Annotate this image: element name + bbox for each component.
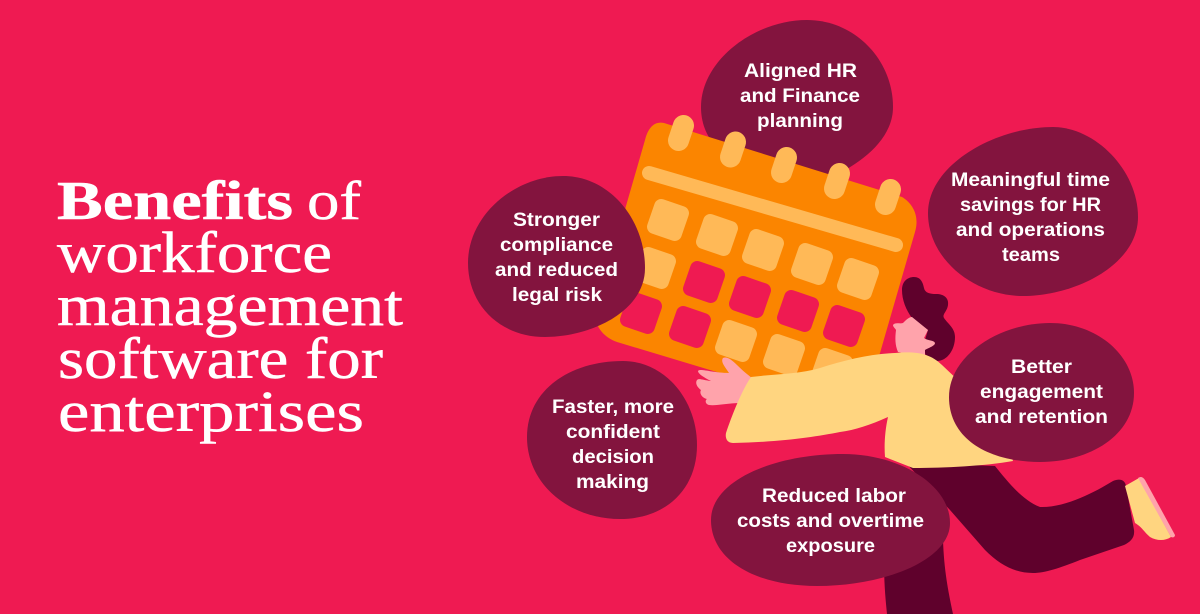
calendar header bar [649, 173, 896, 245]
bubble: better engagement and retention [949, 323, 1134, 462]
title: workforce [57, 220, 332, 285]
bubble: reduced labor costs: exposure [786, 536, 875, 557]
bubble: meaningful time savings: teams [1002, 245, 1060, 266]
bubble: faster decision making: Faster, more [552, 397, 674, 418]
bubble: better engagement and retention: Better [1011, 357, 1073, 378]
shoe [1125, 478, 1171, 540]
bubble: meaningful time savings: Meaningful time [951, 170, 1110, 191]
bubble: faster decision making: decision [572, 447, 654, 468]
hair [902, 277, 955, 361]
title: management [57, 273, 403, 338]
bubble: aligned HR and Finance planning: and Finance [740, 86, 860, 107]
shoe sole [1138, 477, 1175, 537]
bubble: faster decision making: confident [566, 422, 661, 443]
bubble: faster decision making: making [576, 472, 649, 493]
bubble: meaningful time savings: and operations [956, 220, 1105, 241]
icon: calendar [595, 123, 917, 400]
rear leg [905, 462, 1134, 573]
bubble: meaningful time savings [928, 127, 1138, 296]
sweater [726, 352, 1013, 468]
calendar binding rings [678, 126, 890, 204]
bubble: aligned HR and Finance planning: planning [757, 111, 843, 132]
front leg [884, 540, 953, 614]
bubble: stronger compliance: Stronger [513, 210, 601, 231]
calendar board [595, 123, 917, 400]
hand [696, 357, 752, 405]
title [57, 170, 403, 444]
title: software for [58, 326, 383, 391]
bubble: stronger compliance [468, 176, 645, 337]
bubble: faster decision making [527, 361, 697, 519]
bubble: aligned HR and Finance planning: Aligned HR [744, 61, 857, 82]
bubble: aligned HR and Finance planning [701, 20, 893, 180]
calendar day cells: light [632, 197, 881, 392]
calendar day cells: pink [618, 259, 867, 350]
bubble: stronger compliance: compliance [500, 235, 613, 256]
bubble: reduced labor costs [711, 454, 950, 586]
bubble: stronger compliance: legal risk [512, 285, 602, 306]
bubble: reduced labor costs: costs and overtime [737, 511, 924, 532]
bubble: reduced labor costs: Reduced labor [762, 486, 907, 507]
illustration: person carrying calendar [696, 277, 1175, 614]
head and neck [893, 317, 935, 356]
title: of [307, 170, 362, 231]
title: enterprises [58, 379, 364, 444]
bubble: better engagement and retention: and retention [975, 407, 1108, 428]
bubble: stronger compliance: and reduced [495, 260, 618, 281]
title: Benefits [57, 170, 293, 231]
bubble: meaningful time savings: savings for HR [960, 195, 1101, 216]
bubble: better engagement and retention: engagement [980, 382, 1104, 403]
